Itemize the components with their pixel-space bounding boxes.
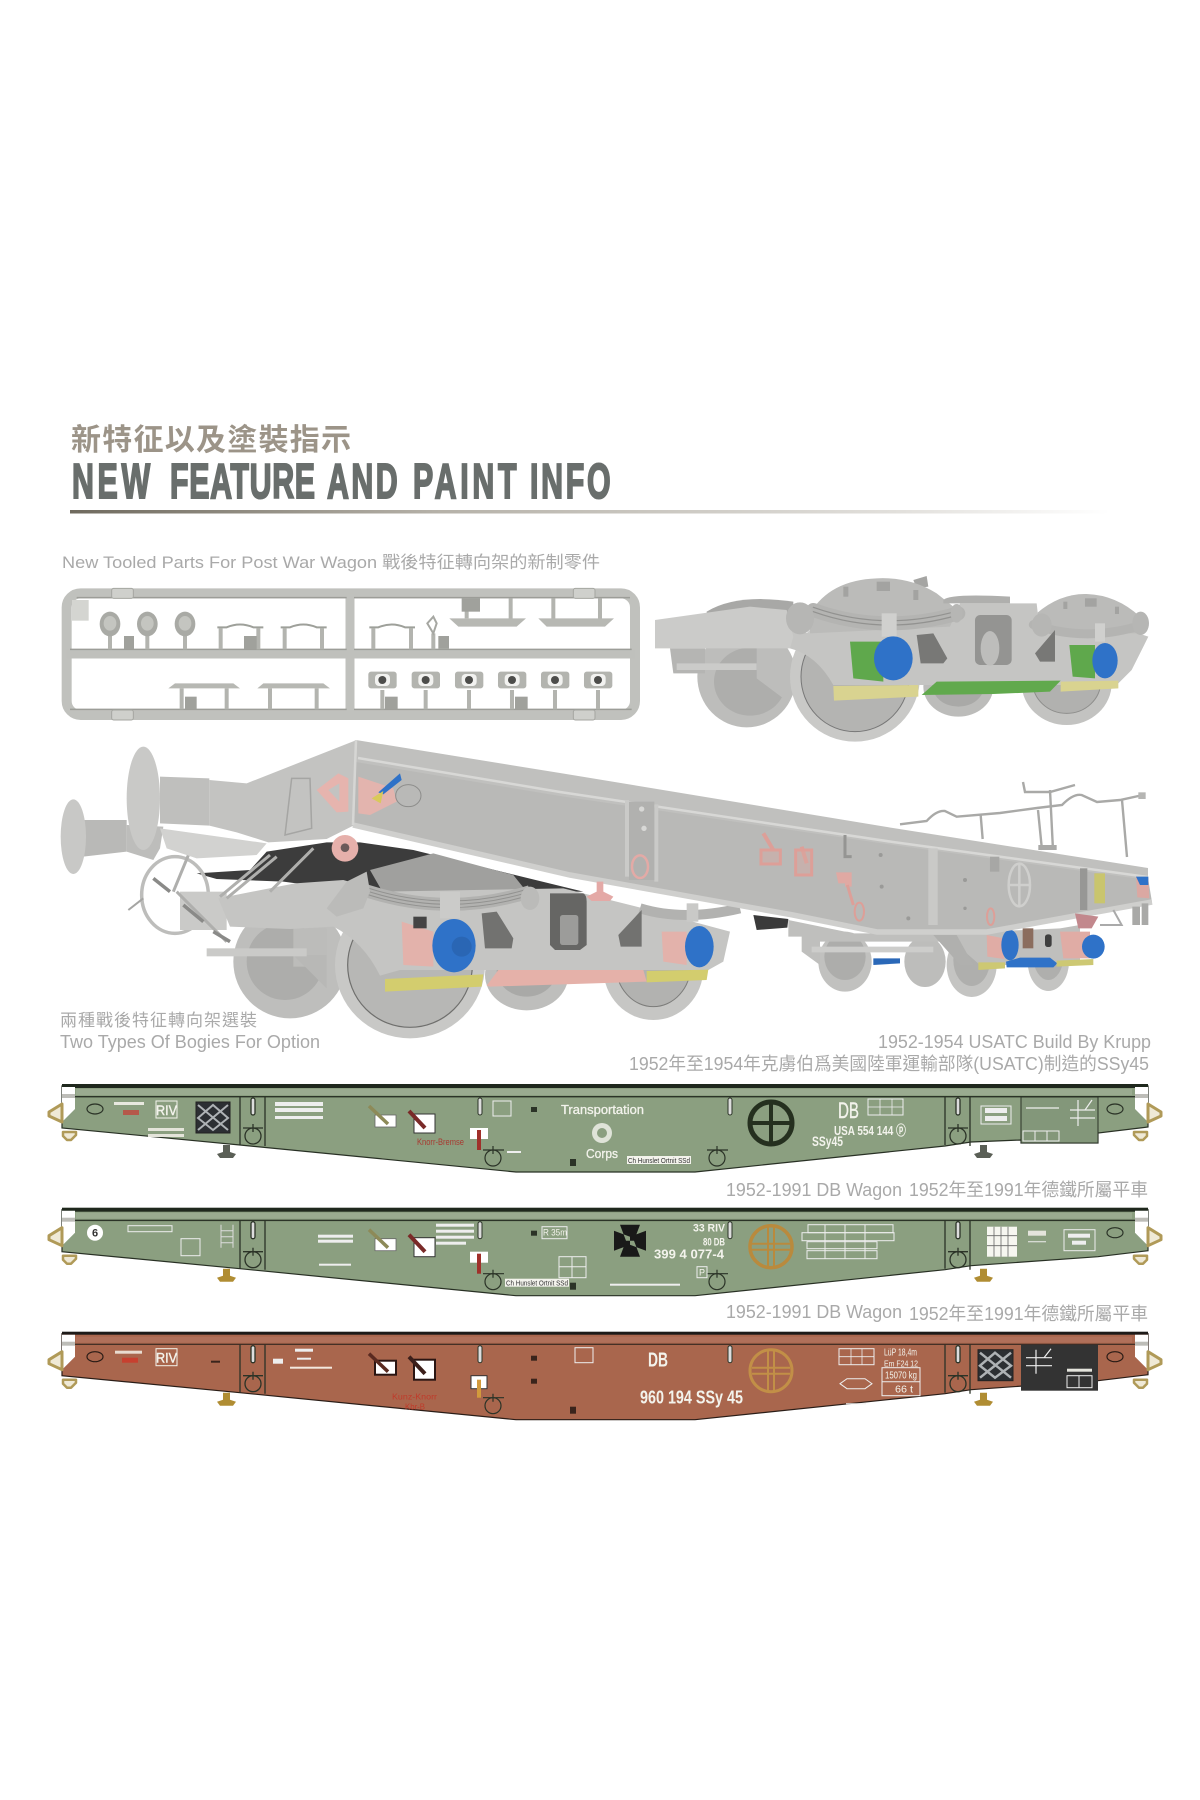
caption: USATC (629, 1032, 1151, 1074)
pink axle boxes (402, 922, 433, 967)
caption: DB wagon brown: 1952年至1991年德鐵所屬平車 (909, 1304, 1148, 1324)
heading rule (70, 510, 1110, 514)
wagon 3 markings: Em F24 12 (884, 1360, 918, 1369)
bogie end block (655, 607, 793, 648)
details on web (587, 800, 1030, 925)
caption: DB wagon green (726, 1180, 1148, 1200)
english title: AND (327, 454, 398, 509)
frame top flange (356, 740, 1148, 880)
chinese title: 新特征以及塗裝指示 (71, 424, 351, 457)
wagon 1 markings: SSy45 (812, 1133, 843, 1149)
wagon 3 markings: 66 t (895, 1385, 913, 1396)
dark underframe shadow (197, 842, 583, 895)
bogie domes (913, 576, 928, 588)
pink anchor (587, 882, 613, 901)
wagon 1 markings: Knorr-Bremse (417, 1137, 464, 1147)
wagon 3 markings: 15070 kg (885, 1371, 917, 1382)
caption: DB wagon green: 1952-1991 DB Wagon (726, 1180, 902, 1200)
frame web (353, 758, 1152, 932)
slot and holes (550, 893, 587, 950)
far bogie (753, 915, 1105, 997)
wagon 2 markings: Ch Hunslet Ortnit SSd (506, 1281, 568, 1288)
near bogie (61, 740, 740, 1038)
caption: two types of bogies: Two Types Of Bogies For Option (60, 1032, 320, 1052)
wagon 1 markings: Transportation (561, 1102, 644, 1117)
bogie under-arm (670, 648, 705, 673)
under arm (180, 892, 227, 930)
leaf springs (350, 882, 740, 915)
wagon 1: green USATC (49, 1084, 1161, 1172)
frame end face (209, 740, 357, 842)
caption: USATC: 1952年至1954年克虜伯爲美國陸軍運輸部隊(USATC)制造的SSy45 (629, 1054, 1149, 1074)
yellow plates (385, 974, 483, 992)
blue axle covers (432, 919, 476, 972)
frame lower flange (353, 825, 1152, 932)
green bar (922, 681, 1061, 695)
pink ring (632, 855, 648, 878)
wagon 2 markings: 33 RIV (693, 1223, 726, 1235)
green axle boxes (850, 642, 883, 682)
wagon 1 markings: RIV (156, 1102, 178, 1118)
wagon 2 markings: R 35m (543, 1228, 567, 1238)
caption: DB wagon brown: 1952-1991 DB Wagon (726, 1302, 902, 1322)
english title: FEATURE (170, 454, 315, 509)
english title: INFO (530, 454, 611, 509)
yellow plates (833, 685, 918, 701)
wagon 3 markings: RIV (156, 1350, 178, 1366)
near bogie frame (218, 880, 730, 976)
main wagon render (61, 740, 1152, 1038)
buffers (83, 820, 127, 857)
upper stems (110, 598, 600, 709)
railing (900, 782, 1146, 857)
english title: PAINT (413, 454, 517, 509)
single bogie render (655, 576, 1149, 742)
bogie frame (783, 603, 1148, 685)
wagon 3: brown DB (49, 1332, 1161, 1420)
bogie springs (813, 607, 1143, 636)
wagon 2 markings: P (699, 1268, 705, 1278)
coil hose (142, 857, 208, 933)
iron cross (614, 1225, 646, 1257)
bogie slot and holes (975, 615, 1012, 665)
wagon 3 markings (115, 1348, 1092, 1414)
wagon 3 markings: LüP 18,4m (884, 1348, 917, 1359)
heading block (70, 424, 1110, 514)
wagon 3 markings: Kbr-B (405, 1403, 425, 1412)
linkage (173, 835, 313, 942)
caption: DB wagon brown (726, 1302, 1148, 1324)
wagon 2 markings: 80 DB (703, 1237, 725, 1249)
wagon 1 markings: DB (838, 1098, 859, 1123)
caption: USATC: 1952-1954 USATC Build By Krupp (878, 1032, 1151, 1052)
bogie wheels (697, 599, 1112, 742)
wagon 2 markings: 399 4 077-4 (654, 1247, 725, 1262)
blue covers (874, 636, 913, 680)
wagon 3 markings: Kunz-Knorr (392, 1393, 437, 1402)
pink levers (763, 833, 807, 863)
wagon 1 markings: USA 554 144 ⓟ (834, 1123, 906, 1138)
wagon 3 markings: 960 194 SSy 45 (640, 1388, 743, 1408)
wagon 1 markings (114, 1098, 1095, 1166)
english title: NEW (72, 454, 151, 509)
caption: two types of bogies: 兩種戰後特征轉向架選裝 (60, 1011, 257, 1030)
frame end edge (353, 740, 356, 825)
wagon 1 markings: Ch Hunslet Ortnit SSd (628, 1158, 690, 1165)
wagon 2 markings: 6 (92, 1228, 98, 1240)
wagon 2 markings (87, 1223, 1095, 1290)
caption: DB wagon green: 1952年至1991年德鐵所屬平車 (909, 1180, 1148, 1200)
sprue of parts (67, 588, 635, 720)
wagon 2: green DB (49, 1208, 1161, 1296)
right end details (1075, 868, 1149, 928)
caption: two types of bogies (60, 1011, 320, 1052)
handwheel (1009, 864, 1030, 906)
caption: new tooled parts: New Tooled Parts For Post War Wagon 戰後特征轉向架的新制零件 (62, 553, 600, 572)
wheels (233, 905, 347, 1018)
wagon 3 markings: DB (648, 1350, 668, 1372)
pink bar (487, 970, 647, 987)
english title (72, 454, 611, 509)
pink parts at frame end (317, 773, 421, 862)
wagon 1 markings: Corps (586, 1146, 618, 1161)
